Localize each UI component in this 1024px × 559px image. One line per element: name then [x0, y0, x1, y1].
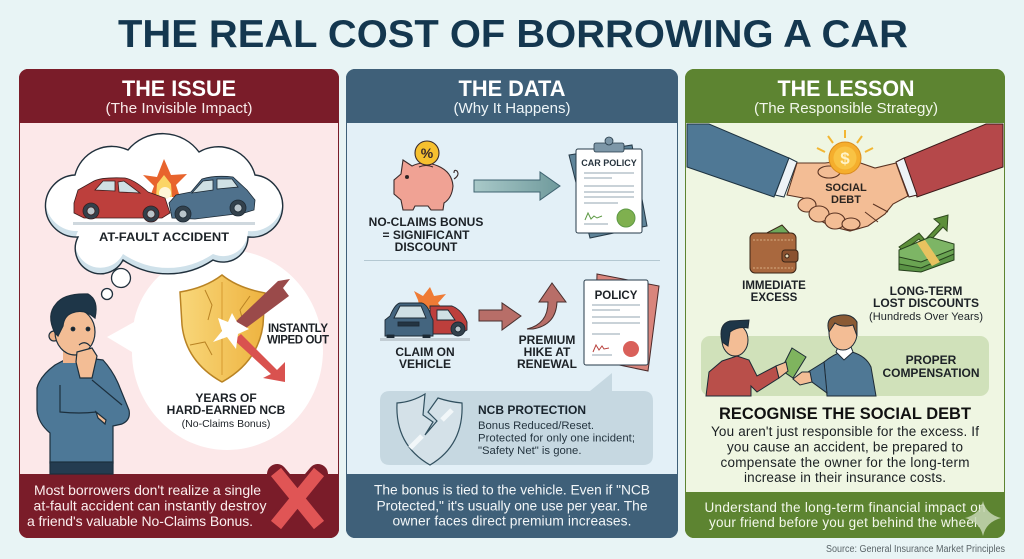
icon: car policy document: CAR POLICY [581, 158, 637, 168]
icon: piggy bank with percent coin [394, 141, 458, 210]
icon: red car [74, 178, 170, 222]
panel: the data [346, 69, 678, 538]
speech bubble [107, 250, 323, 450]
panel: the lesson [685, 69, 1005, 538]
icon: broken shield [397, 394, 462, 465]
heading: the data: THE DATA [458, 76, 566, 101]
icon: red X [276, 472, 319, 525]
footer text: a friend's valuable No-Claims Bonus. [27, 513, 253, 529]
footer text: Most borrowers don't realize a single [34, 482, 261, 498]
icon: handshake with coin: $ [840, 149, 850, 168]
footer text: Protected," it's usually one use per year. The [376, 498, 648, 514]
subheading: the invisible impact: (The Invisible Impact) [106, 100, 252, 117]
icon: sparkle [965, 501, 1001, 536]
heading: the lesson: THE LESSON [778, 76, 914, 101]
label: long-term lost discounts: (Hundreds Over Years) [869, 311, 983, 323]
footer text: at-fault accident can instantly destroy [34, 498, 266, 514]
icon: explosion [143, 159, 187, 197]
arrow: curved upward [527, 283, 566, 329]
label: instantly wiped out: INSTANTLY [268, 323, 328, 335]
label: no-claims bonus: DISCOUNT [395, 240, 458, 254]
icon: car policy document [569, 137, 647, 238]
thought cloud: at-fault accident [45, 128, 283, 274]
icon: wallet [750, 225, 798, 273]
body text: increase in their insurance costs. [744, 470, 946, 485]
NCB protection text: Bonus Reduced/Reset. [478, 420, 594, 432]
label: long-term lost discounts: LONG-TERM [890, 284, 962, 298]
label: proper compensation: COMPENSATION [882, 366, 980, 380]
heading: recognise the social debt: RECOGNISE THE SOCIAL DEBT [719, 404, 972, 423]
label: no-claims bonus: NO-CLAIMS BONUS [369, 215, 483, 229]
label: social debt: SOCIAL [825, 182, 867, 194]
label: claim on vehicle: CLAIM ON [395, 345, 455, 359]
icon: cracked gold shield [180, 275, 290, 382]
label: long-term lost discounts: LOST DISCOUNTS [873, 296, 979, 310]
NCB protection text: NCB PROTECTION [478, 403, 586, 417]
arrow: claim to hike [479, 303, 521, 330]
icon: handshake with coin [687, 124, 1003, 231]
arrow: incoming [231, 279, 290, 334]
NCB protection text: Protected for only one incident; [478, 432, 635, 444]
arrow: bonus to policy [474, 172, 560, 200]
icon: coin [829, 142, 861, 174]
subheading: the responsible strategy: (The Responsible Strategy) [754, 100, 938, 117]
icon: policy document [584, 274, 659, 371]
label: years of hard-earned NCB: (No-Claims Bonus) [182, 418, 270, 430]
label: immediate excess: IMMEDIATE [742, 280, 806, 292]
source note: Source: General Insurance Market Principles [826, 544, 1005, 555]
icon: collision front view [385, 287, 467, 339]
label: years of hard-earned NCB: HARD-EARNED NCB [167, 403, 286, 417]
body text: you cause an accident, be prepared to [727, 440, 963, 454]
compensation band [701, 336, 989, 396]
NCB protection text: "Safety Net" is gone. [478, 445, 581, 457]
label: premium hike: PREMIUM [519, 333, 575, 347]
footer text: owner faces direct premium increases. [392, 514, 632, 528]
subheading: why it happens: (Why It Happens) [454, 100, 570, 117]
label: premium hike: HIKE AT [524, 345, 571, 359]
label: immediate excess: EXCESS [751, 292, 798, 304]
icon: policy document: POLICY [595, 290, 638, 302]
footer text: your friend before you get behind the wheel. [709, 515, 981, 530]
footer text: Understand the long-term financial impact on [704, 500, 986, 515]
label: at-fault accident: AT-FAULT ACCIDENT [99, 230, 230, 244]
label: premium hike: RENEWAL [517, 357, 577, 371]
arrow: outgoing [234, 334, 285, 382]
footer text: The bonus is tied to the vehicle. Even if "NCB [374, 482, 650, 498]
percent sign: % [421, 145, 434, 161]
body text: You aren't just responsible for the excess. If [711, 424, 979, 439]
label: social debt: DEBT [831, 194, 861, 206]
label: proper compensation: PROPER [906, 353, 957, 367]
icon: impact star [213, 313, 249, 349]
label: years of hard-earned NCB: YEARS OF [195, 391, 257, 405]
rays [817, 130, 873, 152]
icon: worried man [37, 294, 129, 474]
panel: the issue [19, 69, 339, 538]
body text: compensate the owner for the long-term [720, 455, 970, 470]
icon: two people exchanging money [706, 315, 876, 396]
heading: the issue: THE ISSUE [122, 76, 236, 101]
icon: money stack with arrow [899, 215, 954, 272]
icon: blue car [169, 176, 255, 222]
callout: NCB protection [380, 373, 653, 465]
label: instantly wiped out: WIPED OUT [267, 334, 329, 346]
ground line [380, 338, 470, 341]
thought bubbles [102, 268, 130, 300]
title: THE REAL COST OF BORROWING A CAR [118, 13, 908, 56]
label: no-claims bonus: = SIGNIFICANT [382, 228, 470, 242]
label: claim on vehicle: VEHICLE [399, 357, 451, 371]
divider [364, 260, 660, 262]
